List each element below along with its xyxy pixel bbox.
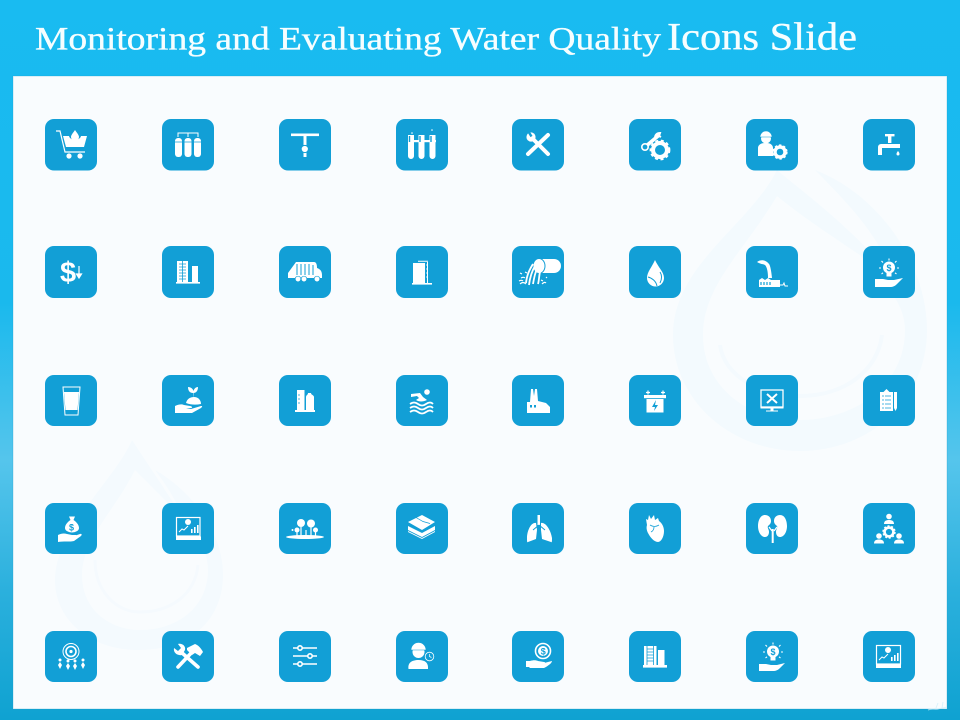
icon: kidneys <box>746 503 798 554</box>
title: Monitoring and Evaluating Water Quality <box>35 22 662 58</box>
icon: dollar with down arrow <box>45 246 97 298</box>
icon: shopping cart with water <box>45 119 97 170</box>
icon: drinking glass <box>45 375 97 426</box>
icon: plant in hand <box>162 375 214 426</box>
icon: discharge pipe <box>512 246 564 298</box>
icon: water filters <box>162 119 214 170</box>
icon: test tubes <box>396 119 448 170</box>
icon: coin in hand <box>512 631 564 682</box>
icon: dollar with down arrow: $ <box>60 257 76 289</box>
icon: factory <box>512 375 564 426</box>
icon: chart on screen <box>162 503 214 554</box>
footer splash mark <box>928 702 947 710</box>
title <box>35 16 857 58</box>
icon: human heart <box>629 503 681 554</box>
icon: twin tanks <box>279 375 331 426</box>
icon: garbage truck <box>279 246 331 298</box>
icon: sliders <box>279 631 331 682</box>
icon: office buildings <box>162 246 214 298</box>
watermark: small water drop <box>55 440 223 650</box>
watermark: large water drop <box>673 170 927 451</box>
icon: coin in hand: $ <box>541 646 546 656</box>
icon: idea in hand: $ <box>886 263 892 273</box>
icon: storage tank <box>396 246 448 298</box>
icon: target with people <box>45 631 97 682</box>
icon: chart on screen <box>863 631 915 682</box>
icon: polluting factory <box>746 246 798 298</box>
icon: layered sheets <box>396 503 448 554</box>
icon: lungs <box>512 503 564 554</box>
icon: water drop <box>629 246 681 298</box>
icon: money bag in hand: $ <box>69 522 74 532</box>
title: Icons Slide <box>667 16 857 58</box>
icon: water tap <box>863 119 915 170</box>
icon: wrench and gear <box>629 119 681 170</box>
icon: money bag in hand <box>45 503 97 554</box>
icon: crossed tools <box>512 119 564 170</box>
icon: battery <box>629 375 681 426</box>
icon: pipe junction with valve <box>279 119 331 170</box>
icon: city buildings <box>629 631 681 682</box>
icon: trees on island <box>279 503 331 554</box>
icon: hammer and wrench <box>162 631 214 682</box>
icon: clipboard and pencil <box>863 375 915 426</box>
icon: monitor with tools <box>746 375 798 426</box>
icon: team around gear <box>863 503 915 554</box>
icon: engineer with gear <box>746 119 798 170</box>
icon: idea in hand: $ <box>770 647 776 657</box>
icon: swimmer <box>396 375 448 426</box>
icon: idea in hand <box>746 631 798 682</box>
icon: worker with clock <box>396 631 448 682</box>
icon: idea in hand <box>863 246 915 298</box>
